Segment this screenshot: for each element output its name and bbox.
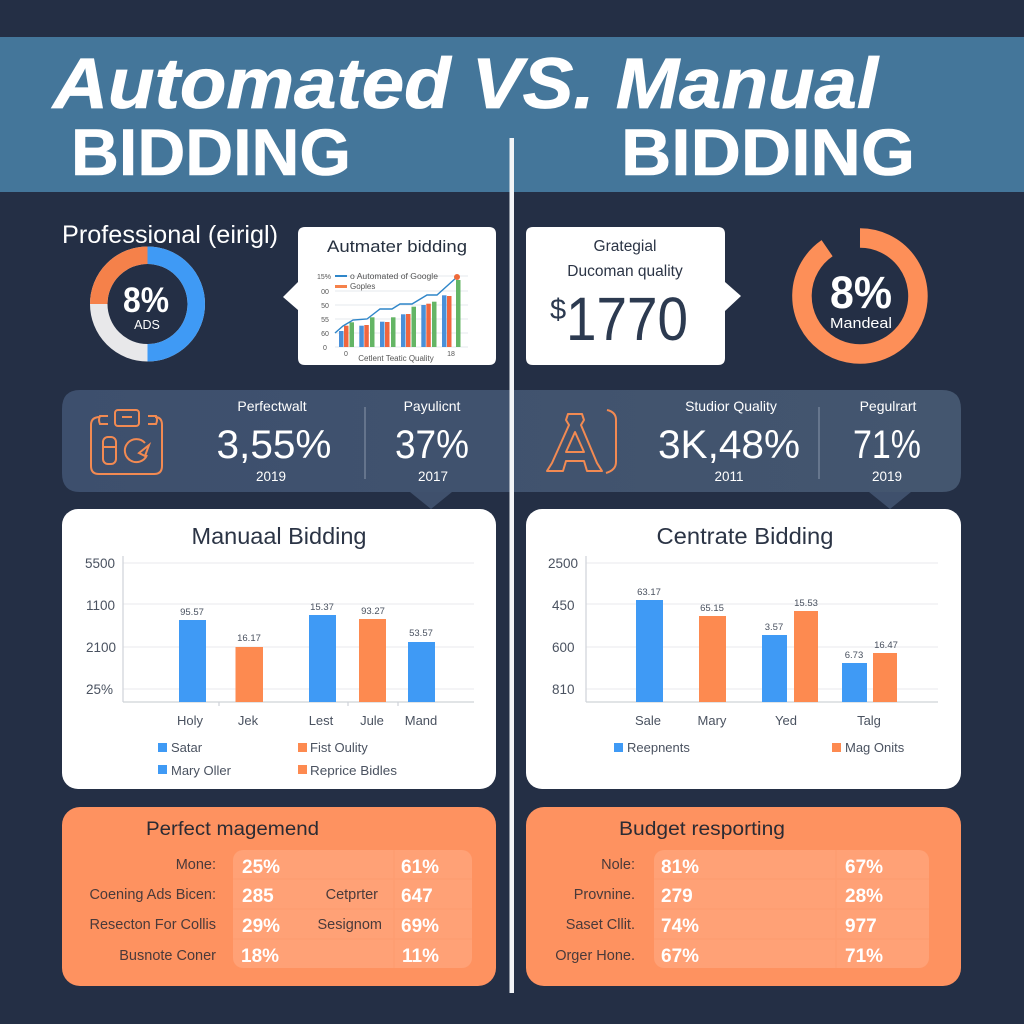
values: 74% [661, 916, 699, 937]
y axis labels: 450 [552, 598, 575, 613]
stat: studior quality: 2011 [714, 469, 744, 484]
stat: pegulrart: 71% [853, 423, 921, 467]
x axis labels [635, 713, 881, 728]
x axis labels: Jule [360, 713, 384, 728]
left donut chart [99, 255, 196, 353]
values: 28% [845, 886, 883, 907]
y axis labels: 600 [552, 640, 575, 655]
axis labels: 18 [447, 351, 455, 358]
stat: studior quality: Studior Quality [685, 398, 777, 414]
row labels: Mone: [176, 857, 216, 873]
y axis labels: 1100 [86, 598, 115, 613]
row labels: Coening Ads Bicen: [89, 887, 216, 903]
x axis labels: Talg [857, 713, 881, 728]
y axis labels: 810 [552, 682, 575, 697]
stat: payulicnt: Payulicnt [404, 398, 461, 414]
bars [636, 600, 897, 702]
center divider [510, 138, 514, 993]
stat: pegulrart: 2019 [872, 469, 902, 484]
row labels: Orger Hone. [555, 948, 635, 964]
stat: studior quality: 3K,48% [658, 423, 800, 467]
panel: budget resporting table [526, 807, 961, 986]
axis labels: 50 [321, 303, 329, 310]
row labels: Provnine. [574, 887, 635, 903]
values: 647 [401, 886, 433, 907]
price card label one: Grategial [594, 238, 656, 255]
legend: Satar [171, 740, 203, 755]
legend: Reprice Bidles [310, 763, 398, 778]
bar value labels: 95.57 [180, 607, 204, 618]
x axis labels: Mand [405, 713, 437, 728]
bar value labels: 15.37 [310, 602, 334, 613]
values: 61% [401, 857, 439, 878]
bar value labels [637, 587, 898, 661]
x axis labels: Lest [309, 713, 334, 728]
bar value labels: 65.15 [700, 603, 724, 614]
stats band [62, 390, 961, 509]
axis labels [317, 274, 455, 358]
row labels: Saset Cllit. [566, 917, 635, 933]
stat: pegulrart: Pegulrart [860, 398, 917, 414]
axis labels: 0 [344, 351, 348, 358]
heading: right bidding: BIDDING [621, 115, 915, 189]
panel: perfect management table [62, 807, 496, 986]
donut caption: ADS [134, 318, 160, 332]
bar value labels: 6.73 [845, 650, 863, 661]
axis labels: 0 [323, 345, 327, 352]
x axis labels: Jek [238, 713, 259, 728]
y axis labels: 2100 [86, 640, 116, 655]
inner table background [654, 850, 929, 968]
price value: 1770 [566, 285, 688, 353]
bar value labels [180, 602, 433, 644]
stat: pegulrart [853, 398, 921, 484]
legend [158, 740, 398, 778]
inner table background [233, 850, 472, 968]
panel: centrate bidding chart [526, 509, 961, 789]
callout: automated bidding chart [283, 227, 496, 365]
y axis labels [548, 556, 578, 697]
values: 81% [661, 857, 699, 878]
values: 25% [242, 857, 280, 878]
donut value: 8% [830, 267, 892, 318]
row labels [89, 857, 382, 964]
row labels [555, 857, 635, 964]
x axis labels: Holy [177, 713, 203, 728]
values: 67% [845, 857, 883, 878]
grouped bars [339, 280, 460, 347]
bar value labels: 15.53 [794, 598, 818, 609]
heading: left bidding: BIDDING [71, 115, 351, 189]
legend: Fist Oulity [310, 740, 368, 755]
bars [179, 615, 435, 702]
chart title: Manuaal Bidding [192, 523, 366, 549]
row labels: Cetprter [326, 887, 378, 903]
x axis labels: Yed [775, 713, 797, 728]
values: 71% [845, 946, 883, 967]
callout: price card [526, 227, 741, 365]
legend: Reepnents [627, 740, 690, 755]
chart legend [335, 272, 439, 291]
bar value labels: 16.47 [874, 640, 898, 651]
bar value labels: 3.57 [765, 622, 783, 633]
pointer left [410, 492, 452, 509]
stat: payulicnt: 2017 [418, 469, 448, 484]
row labels: Resecton For Collis [89, 917, 216, 933]
chart legend: o Automated of Google [350, 272, 439, 281]
panel heading: Perfect magemend [146, 818, 319, 840]
stat: perfect [216, 398, 332, 484]
row labels: Sesignom [318, 917, 382, 933]
y axis labels [85, 556, 116, 697]
chart title: Centrate Bidding [656, 523, 834, 549]
trend end marker [454, 274, 460, 280]
bar value labels: 16.17 [237, 633, 261, 644]
title line 1: Automated VS. Manual [51, 45, 879, 124]
y axis labels: 2500 [548, 556, 578, 571]
trend line [335, 277, 457, 333]
axis labels: 15% [317, 274, 331, 281]
stat: payulicnt [395, 398, 469, 484]
legend: Mag Onits [845, 740, 905, 755]
values [661, 857, 883, 967]
chart legend: Goples [350, 282, 375, 291]
left donut heading: Professional (eirigl) [62, 221, 278, 249]
axis labels: 60 [321, 331, 329, 338]
values: 67% [661, 946, 699, 967]
stat: perfect: Perfectwalt [237, 398, 307, 414]
callout title: Autmater bidding [327, 237, 467, 256]
pointer right [869, 492, 911, 509]
x axis labels: Sale [635, 713, 661, 728]
panel: manual bidding chart [62, 509, 496, 789]
bar value labels: 63.17 [637, 587, 661, 598]
values: 977 [845, 916, 877, 937]
icon: calendar tools [91, 410, 162, 474]
values: 279 [661, 886, 693, 907]
row labels: Busnote Coner [119, 948, 216, 964]
price value: $ [550, 294, 566, 326]
legend: Mary Oller [171, 763, 232, 778]
right donut chart [802, 238, 918, 354]
x axis labels [177, 713, 437, 728]
values: 285 [242, 886, 274, 907]
y axis labels: 25% [86, 682, 113, 697]
values: 11% [402, 946, 439, 967]
header band [0, 37, 1024, 192]
row labels: Nole: [601, 857, 635, 873]
y axis labels: 5500 [85, 556, 115, 571]
chart caption: Cetlent Teatic Quality [358, 354, 434, 363]
x axis labels: Mary [698, 713, 727, 728]
values [241, 857, 439, 967]
legend [614, 740, 905, 755]
bar value labels: 53.57 [409, 628, 433, 639]
donut value: 8% [123, 281, 169, 320]
values: 29% [242, 916, 280, 937]
axis labels: 55 [321, 317, 329, 324]
stat: perfect: 2019 [256, 469, 286, 484]
values: 69% [401, 916, 439, 937]
stat: payulicnt: 37% [395, 423, 469, 467]
stat: perfect: 3,55% [216, 423, 332, 467]
values: 18% [241, 946, 279, 967]
bar value labels: 93.27 [361, 606, 385, 617]
donut caption: Mandeal [830, 316, 892, 332]
icon: letter A bracket [547, 410, 616, 473]
panel heading: Budget resporting [619, 818, 785, 840]
stat: studior quality [658, 398, 800, 484]
axis labels: 00 [321, 289, 329, 296]
price card label two: Ducoman quality [567, 263, 683, 280]
